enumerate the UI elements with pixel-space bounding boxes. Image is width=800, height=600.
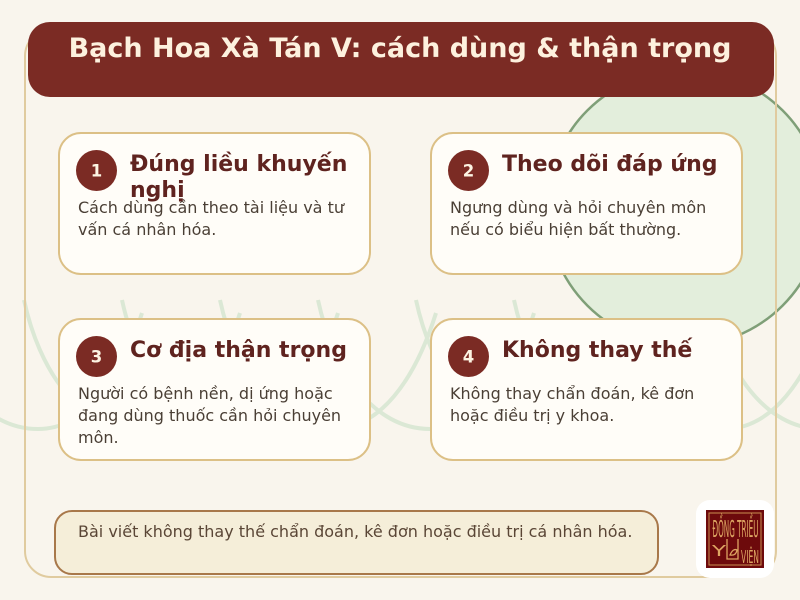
badge 1: 1 bbox=[91, 162, 102, 180]
badge 2 bbox=[448, 150, 489, 191]
heading 4: Không thay thế bbox=[502, 338, 693, 363]
badge 3 bbox=[76, 336, 117, 377]
badge 4 bbox=[448, 336, 489, 377]
panel: card 2 bbox=[431, 133, 742, 274]
badge 4: 4 bbox=[463, 348, 474, 366]
body 1: Cách dùng cần theo tài liệu và tư bbox=[78, 198, 344, 217]
logo bbox=[696, 500, 774, 578]
badge 1 bbox=[76, 150, 117, 191]
logo wordmark: ĐỒNG TRIỀU bbox=[713, 513, 758, 543]
body 2: Ngưng dùng và hỏi chuyên môn bbox=[450, 198, 706, 217]
body 3: môn. bbox=[78, 428, 119, 447]
logo small: Y bbox=[710, 542, 727, 560]
body 3: đang dùng thuốc cần hỏi chuyên bbox=[78, 406, 341, 425]
badge 2: 2 bbox=[463, 162, 474, 180]
panel: card 1 bbox=[59, 133, 370, 274]
heading 1: nghị bbox=[130, 178, 185, 203]
disclaimer panel bbox=[55, 511, 658, 574]
background wave pattern bbox=[0, 300, 800, 429]
decorative green circle bbox=[547, 70, 800, 346]
heading 3: Cơ địa thận trọng bbox=[130, 338, 347, 363]
header banner bbox=[28, 22, 774, 97]
logo word: VIỆN bbox=[741, 545, 759, 568]
body 3: Người có bệnh nền, dị ứng hoặc bbox=[78, 384, 333, 403]
heading 1: Đúng liều khuyến bbox=[130, 152, 347, 177]
panel: card 4 bbox=[431, 319, 742, 460]
body 4: hoặc điều trị y khoa. bbox=[450, 406, 614, 425]
body 4: Không thay chẩn đoán, kê đơn bbox=[450, 384, 694, 403]
title: Bạch Hoa Xà Tán V: cách dùng & thận trọng bbox=[69, 33, 731, 64]
disclaimer text: Bài viết không thay thế chẩn đoán, kê đơn hoặc điều trị cá nhân hóa. bbox=[78, 522, 632, 541]
body 1: vấn cá nhân hóa. bbox=[78, 220, 216, 239]
body 2: nếu có biểu hiện bất thường. bbox=[450, 220, 681, 239]
logo leaf bbox=[727, 539, 738, 559]
badge 3: 3 bbox=[91, 348, 102, 366]
heading 2: Theo dõi đáp ứng bbox=[502, 152, 718, 177]
panel: card 3 bbox=[59, 319, 370, 460]
